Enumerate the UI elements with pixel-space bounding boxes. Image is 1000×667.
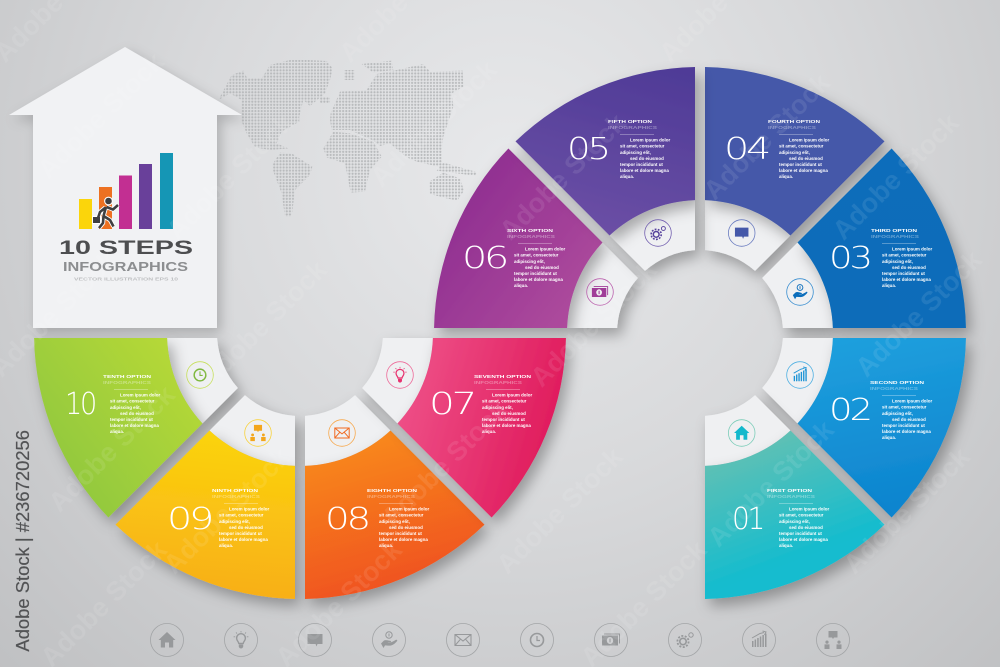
icon: banknotes, segment 06 [587,279,613,305]
text block: seventh option: INFOGRAPHICS [474,380,522,385]
watermark overlay: Adobe Stock [195,254,333,393]
text block: third option: Lorem ipsum dolor [892,247,932,252]
text block: first option [732,488,829,548]
text block: eighth option [325,488,429,548]
icon: running businessman [92,197,118,228]
text block: ninth option: tempor incididunt ut [219,531,262,536]
text block: sixth option: labore et dolore magna [514,277,563,282]
text block: third option: adipiscing elit, [882,259,913,264]
segment 04: fourth option [705,67,884,271]
text block: fourth option [724,119,829,179]
icon: clock, segment 10 [187,362,213,388]
caption: vector illustration: VECTOR ILLUSTRATION EPS 10 [74,276,179,282]
text block: tenth option: 10 [65,387,95,422]
bottom icon: speech bubble [298,624,332,656]
text block: seventh option: adipiscing elit, [482,405,513,410]
text block: seventh option: Lorem ipsum dolor [492,393,532,398]
text block: tenth option: Lorem ipsum dolor [120,393,160,398]
bottom icon: clock [520,624,554,656]
text block: fifth option: Lorem ipsum dolor [630,138,670,143]
text block: fifth option: sed do eiusmod [630,156,664,161]
bottom icon: home [150,624,184,656]
watermark overlay: Adobe Stock [365,54,503,193]
text block: fifth option: adipiscing elit, [620,150,651,155]
icon: envelope, segment 08 [329,420,355,446]
text block: first option: FIRST OPTION [767,488,813,494]
text block: ninth option: 09 [167,502,212,537]
text block: third option: 03 [829,241,870,276]
icon: light bulb, segment 07 [387,362,413,388]
subheading: infographics: INFOGRAPHICS [63,260,188,274]
text block: sixth option: 06 [462,241,507,276]
icon: home, segment 01 [728,420,755,446]
text block: eighth option: sed do eiusmod [389,525,423,530]
text block: tenth option: aliqua. [110,429,124,434]
world dot map [218,60,477,217]
text block: ninth option: sit amet, consectetur [219,513,264,518]
text block: third option: labore et dolore magna [882,277,931,282]
bottom icon row [150,624,850,656]
text block: second option [829,380,932,440]
watermark overlay: Adobe Stock [158,441,296,580]
text block: first option: tempor incididunt ut [779,531,822,536]
bottom icon: hand with coin [372,624,406,656]
text block: second option: 02 [829,393,870,428]
bottom icon: envelope [446,624,480,656]
text block: first option: sit amet, consectetur [779,513,824,518]
text block: fourth option: aliqua. [779,174,793,179]
text block: second option: labore et dolore magna [882,429,931,434]
text block: seventh option: labore et dolore magna [482,423,531,428]
watermark overlay: Adobe Stock [494,107,632,246]
text block: first option: Lorem ipsum dolor [789,507,829,512]
text block: second option: tempor incididunt ut [882,423,925,428]
text block: fifth option: labore et dolore magna [620,168,669,173]
text block: fourth option: sed do eiusmod [789,156,823,161]
text block: ninth option: NINTH OPTION [212,488,259,494]
text block: sixth option: aliqua. [514,283,528,288]
house arrow panel [9,47,242,328]
text block: seventh option: SEVENTH OPTION [474,374,532,380]
text block: sixth option: tempor incididunt ut [514,271,557,276]
watermark overlay: Adobe Stock [376,394,514,533]
bottom icon: org chart [816,624,850,656]
text block: fourth option: labore et dolore magna [779,168,828,173]
watermark overlay: Adobe Stock [838,441,976,580]
text block: ninth option: adipiscing elit, [219,519,250,524]
text block: sixth option: Lorem ipsum dolor [525,247,565,252]
text block: second option: sit amet, consectetur [882,405,927,410]
text block: third option: THIRD OPTION [871,228,918,234]
text block: fifth option: INFOGRAPHICS [608,125,657,130]
watermark overlay: Adobe Stock [43,379,181,518]
vertical stock id label: Adobe Stock | #236720256 [12,430,33,652]
text block: fifth option: aliqua. [620,174,634,179]
text block: ninth option: INFOGRAPHICS [212,494,260,499]
watermark overlay: Adobe Stock [702,414,840,553]
bottom icon: gears [668,624,702,656]
text block: eighth option: 08 [325,502,369,537]
icon: gears, segment 05 [645,220,671,246]
segment 09: ninth option [116,395,295,599]
house shape [9,47,242,328]
text block: sixth option: adipiscing elit, [514,259,545,264]
text block: tenth option: tempor incididunt ut [110,417,153,422]
icon: hand with coin, segment 03 [787,279,813,305]
text block: sixth option: sed do eiusmod [525,265,559,270]
text block: fourth option: Lorem ipsum dolor [789,138,829,143]
text block: ninth option: labore et dolore magna [219,537,268,542]
text block: seventh option [429,374,532,434]
text block: first option: labore et dolore magna [779,537,828,542]
text block: second option: sed do eiusmod [892,417,926,422]
text block: sixth option [462,228,565,288]
text block: second option: Lorem ipsum dolor [892,399,932,404]
text block: fourth option: tempor incididunt ut [779,162,822,167]
segment 08: eighth option [305,395,484,599]
text block: tenth option: adipiscing elit, [110,405,141,410]
text block: fourth option: adipiscing elit, [779,150,810,155]
text block: ninth option: aliqua. [219,543,233,548]
watermark overlay: Adobe Stock [698,67,836,206]
segment 10: tenth option [34,338,238,518]
text block: third option: sed do eiusmod [892,265,926,270]
text block: seventh option: sed do eiusmod [492,411,526,416]
watermark overlay: Adobe Stock [525,254,663,393]
text block: second option: INFOGRAPHICS [870,386,918,391]
icon: org chart, segment 09 [245,420,271,446]
text block: sixth option: sit amet, consectetur [514,253,559,258]
text block: fourth option: sit amet, consectetur [779,144,824,149]
text block: third option: aliqua. [882,283,896,288]
segment 03: third option [762,148,966,328]
text block: second option: adipiscing elit, [882,411,913,416]
text block: second option: SECOND OPTION [870,380,925,386]
watermark overlay: Adobe Stock [161,107,299,246]
text block: seventh option: sit amet, consectetur [482,399,527,404]
text block: eighth option: sit amet, consectetur [379,513,424,518]
text block: fourth option: 04 [724,132,769,167]
text block: eighth option: labore et dolore magna [379,537,428,542]
bottom icon: bulb [224,624,258,656]
text block: ninth option: Lorem ipsum dolor [229,507,269,512]
bottom icon: bar chart [742,624,776,656]
segment 01: first option [705,395,884,599]
text block: tenth option: INFOGRAPHICS [103,380,151,385]
text block: third option [829,228,932,288]
text block: third option: INFOGRAPHICS [871,234,919,239]
bar chart [79,153,173,229]
text block: fifth option: 05 [567,132,608,167]
text block: fourth option: FOURTH OPTION [768,119,821,125]
text block: tenth option [65,374,160,434]
text block: sixth option: INFOGRAPHICS [507,234,555,239]
watermark overlay: Adobe Stock [32,46,170,185]
segment 07: seventh option [362,338,566,518]
text block: fifth option [567,119,670,179]
text block: third option: sit amet, consectetur [882,253,927,258]
segment 02: second option [762,338,966,518]
text block: first option: aliqua. [779,543,793,548]
text block: seventh option: aliqua. [482,429,496,434]
text block: eighth option: EIGHTH OPTION [367,488,418,494]
text block: seventh option: 07 [429,387,474,422]
text block: tenth option: labore et dolore magna [110,423,159,428]
text block: eighth option: tempor incididunt ut [379,531,422,536]
text block: fourth option: INFOGRAPHICS [768,125,816,130]
text block: seventh option: tempor incididunt ut [482,417,525,422]
text block: fifth option: tempor incididunt ut [620,162,663,167]
text block: sixth option: SIXTH OPTION [507,228,554,234]
text block: fifth option: FIFTH OPTION [608,119,653,125]
text block: first option: INFOGRAPHICS [767,494,815,499]
text block: eighth option: adipiscing elit, [379,519,410,524]
heading: 10 steps: 10 STEPS [59,237,193,259]
text block: fifth option: sit amet, consectetur [620,144,665,149]
segment 06: sixth option [434,148,638,328]
text block: second option: aliqua. [882,435,896,440]
icon: speech bubble, segment 04 [728,220,755,246]
watermark overlay: Adobe Stock [827,107,965,246]
bottom icon: banknotes [594,624,628,656]
icon: bar chart, segment 02 [787,362,813,388]
text block: third option: tempor incididunt ut [882,271,925,276]
text block: eighth option: aliqua. [379,543,393,548]
watermark overlay: Adobe Stock [491,441,629,580]
text block: tenth option: sed do eiusmod [120,411,154,416]
text block: ninth option: sed do eiusmod [229,525,263,530]
text block: first option: adipiscing elit, [779,519,810,524]
text block: ninth option [167,488,269,548]
text block: first option: 01 [732,502,763,537]
segment 05: fifth option [516,67,695,271]
text block: tenth option: TENTH OPTION [103,374,152,380]
text block: first option: sed do eiusmod [789,525,823,530]
text block: eighth option: Lorem ipsum dolor [389,507,429,512]
watermark overlay: Adobe Stock [850,244,988,383]
text block: eighth option: INFOGRAPHICS [367,494,415,499]
text block: tenth option: sit amet, consectetur [110,399,155,404]
